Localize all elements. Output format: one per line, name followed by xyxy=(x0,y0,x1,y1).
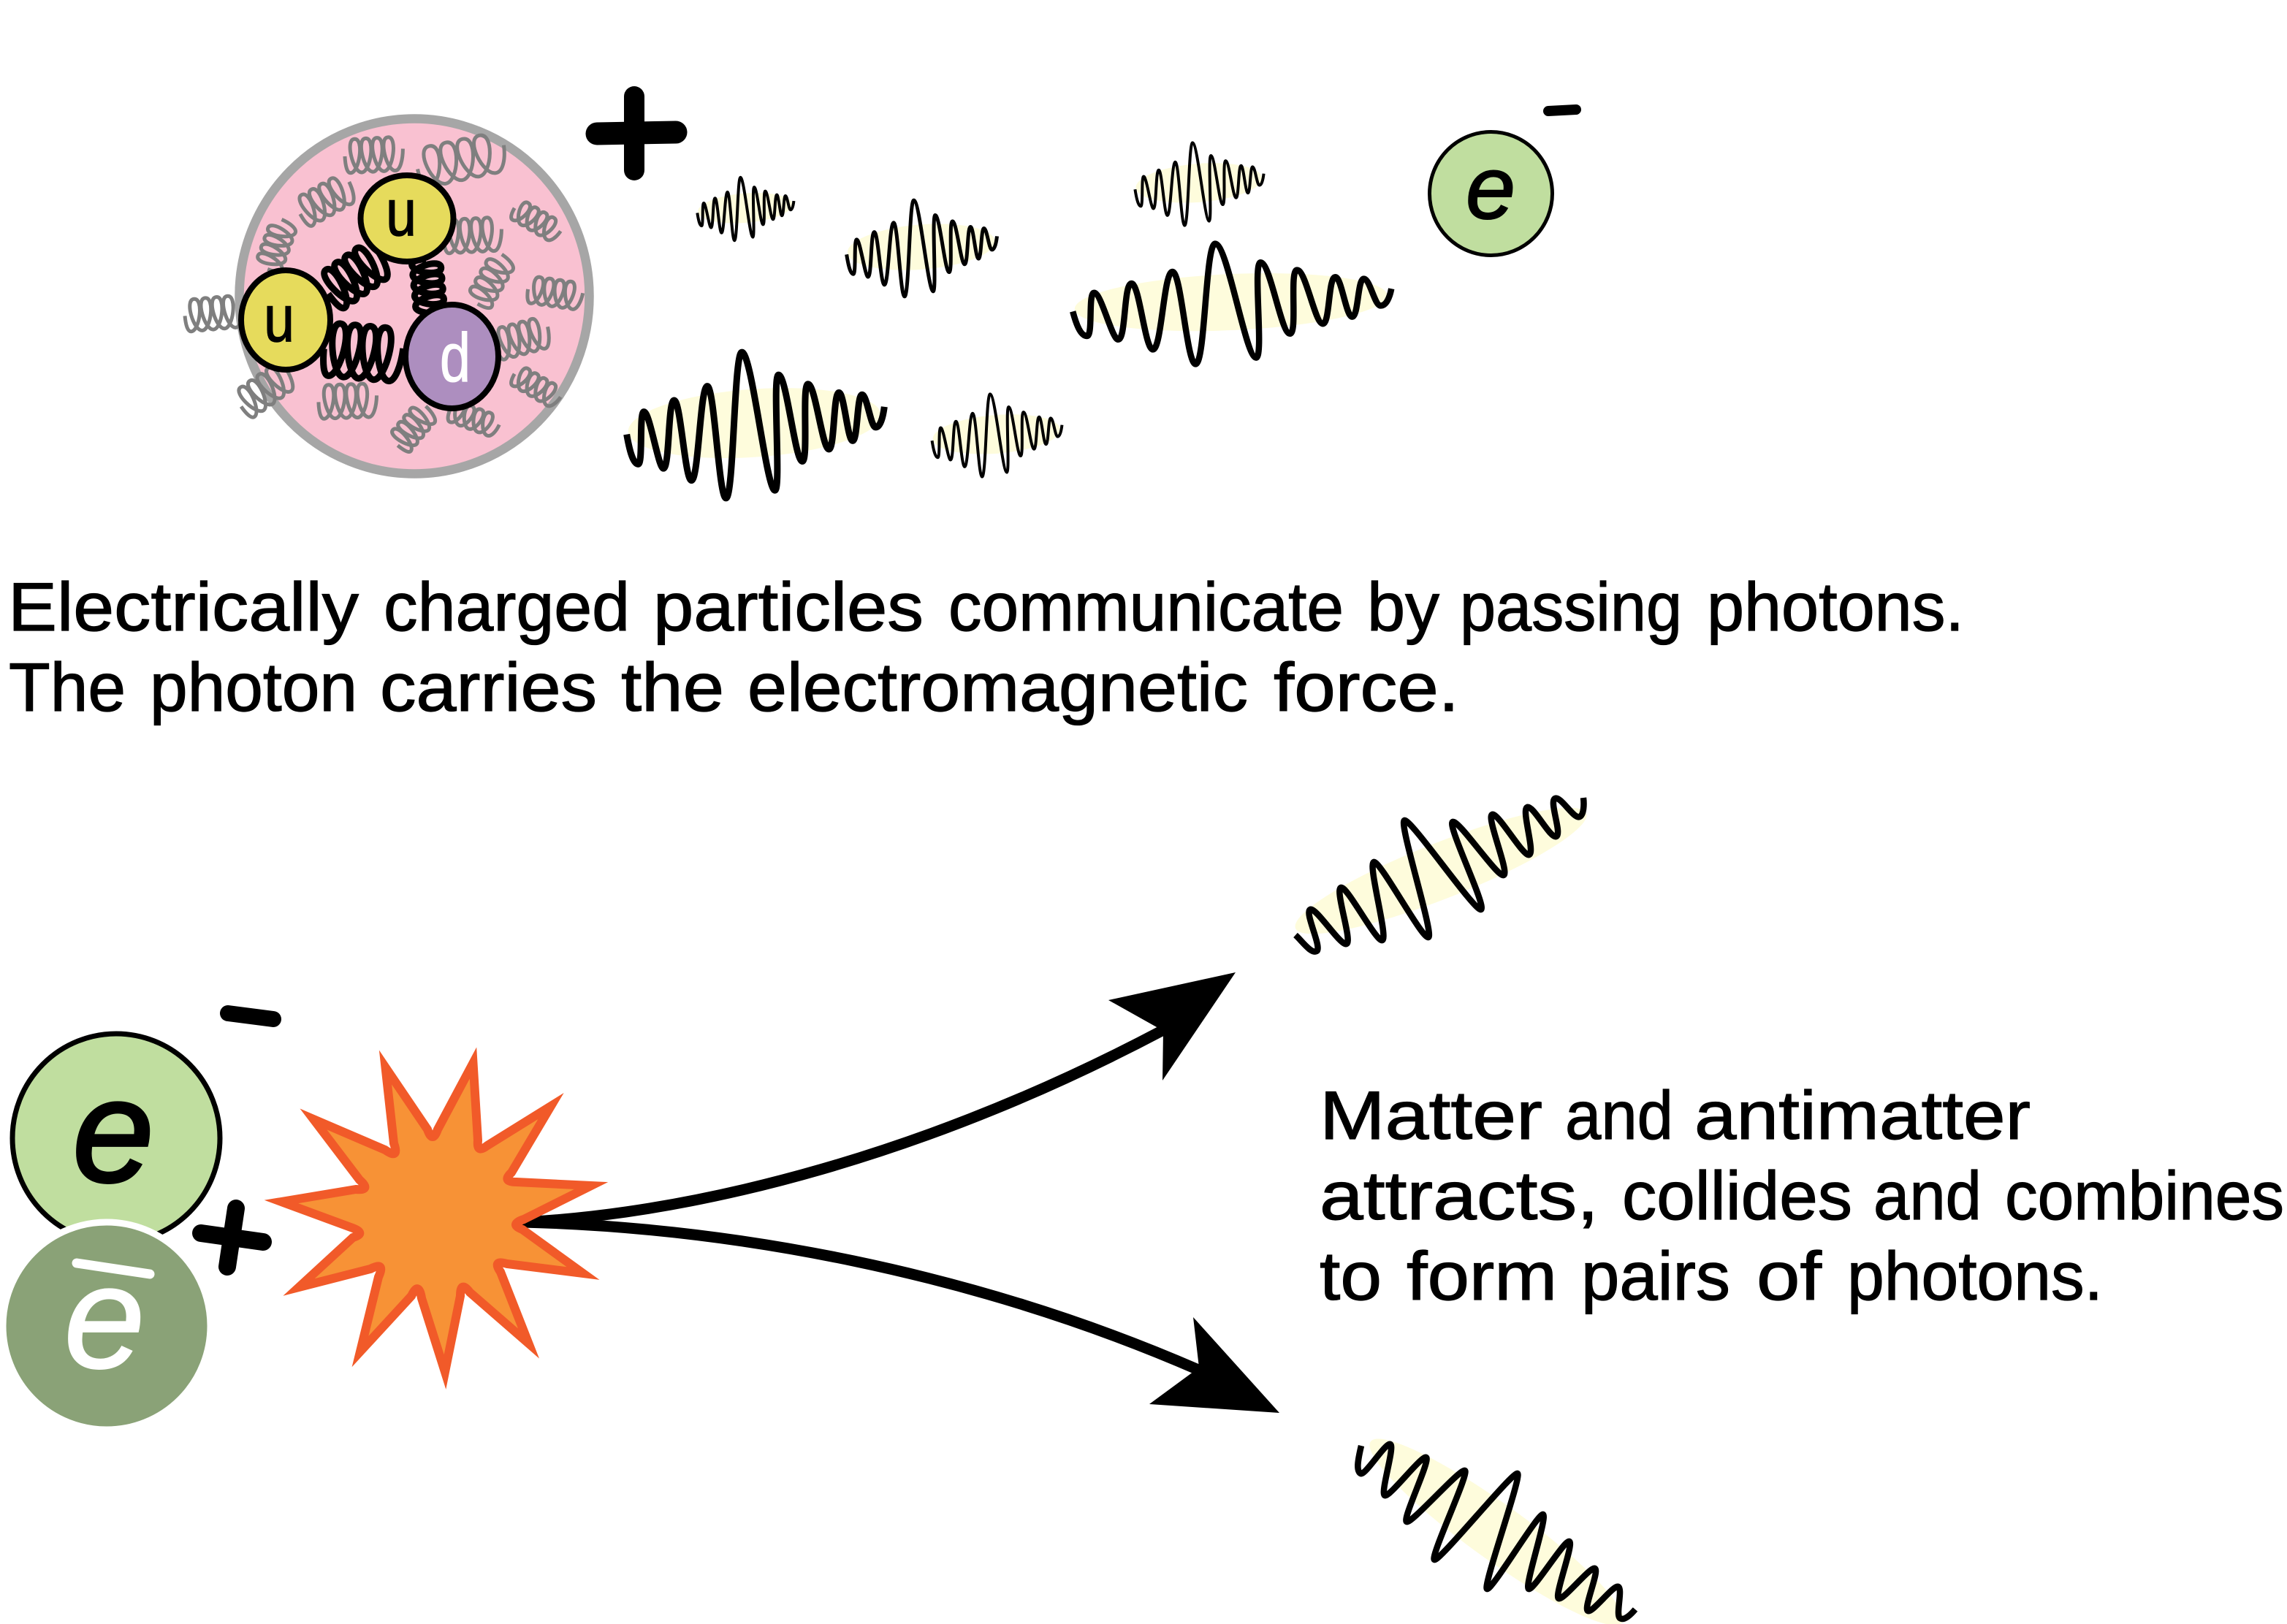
annihilation starburst xyxy=(281,1063,591,1372)
gray sea gluons xyxy=(183,131,585,454)
text: matter and antimatter explanation: form xyxy=(1407,1238,1557,1314)
down quark xyxy=(406,305,498,408)
plus sign on proton xyxy=(597,96,676,170)
text: electromagnetic force explanation: passing xyxy=(1460,568,1682,645)
up quark, top xyxy=(361,175,453,262)
arrow: lower photon path xyxy=(522,1222,1279,1413)
text: electromagnetic force explanation: carries xyxy=(380,649,597,725)
text: electromagnetic force explanation: by xyxy=(1367,568,1439,645)
electron, top: e xyxy=(1466,138,1515,237)
text: matter and antimatter explanation: attracts, xyxy=(1320,1157,1599,1234)
text: matter and antimatter explanation xyxy=(1320,1077,2284,1314)
photon: outgoing lower xyxy=(1355,1419,1638,1624)
text: matter and antimatter explanation: antimatter xyxy=(1694,1077,2031,1154)
photon: small bottom xyxy=(932,394,1062,477)
text: matter and antimatter explanation: to xyxy=(1320,1238,1382,1314)
text: matter and antimatter explanation: and xyxy=(1565,1077,1673,1154)
text: electromagnetic force explanation: the xyxy=(621,649,724,725)
text: electromagnetic force explanation xyxy=(8,568,1964,725)
minus sign on electron, top xyxy=(1548,110,1576,111)
minus sign on electron, bottom xyxy=(228,1013,273,1019)
proton body xyxy=(240,118,589,473)
photon: small top xyxy=(1135,142,1264,226)
photon: medium xyxy=(846,200,997,297)
positron xyxy=(3,1222,210,1430)
text: matter and antimatter explanation: Matter xyxy=(1320,1077,1542,1154)
positron: e xyxy=(64,1236,145,1399)
text: electromagnetic force explanation: force. xyxy=(1274,649,1459,725)
text: electromagnetic force explanation: communicate xyxy=(948,568,1344,645)
up quark, left xyxy=(241,270,330,370)
up quark, top: u xyxy=(386,176,416,250)
electron, top xyxy=(1429,131,1552,256)
text: electromagnetic force explanation: photon xyxy=(150,649,357,725)
electron, bottom xyxy=(12,1034,220,1243)
up quark, left: u xyxy=(264,282,294,356)
text: matter and antimatter explanation: and xyxy=(1873,1157,1982,1234)
text: matter and antimatter explanation: photons. xyxy=(1847,1238,2103,1314)
text: matter and antimatter explanation: of xyxy=(1757,1238,1822,1314)
text: electromagnetic force explanation: charged xyxy=(384,568,630,645)
photon: small left xyxy=(697,178,794,240)
text: electromagnetic force explanation: particles xyxy=(653,568,924,645)
photon: large upper right xyxy=(1072,244,1391,364)
arrow: upper photon path xyxy=(522,972,1236,1222)
photon: large lower left xyxy=(626,352,884,498)
down quark: d xyxy=(440,319,471,397)
photon: outgoing upper xyxy=(1285,788,1597,954)
text: matter and antimatter explanation: collides xyxy=(1622,1157,1852,1234)
text: matter and antimatter explanation: pairs xyxy=(1581,1238,1730,1314)
text: electromagnetic force explanation: The xyxy=(9,649,126,725)
text: electromagnetic force explanation: photons. xyxy=(1707,568,1964,645)
black gluons between quarks xyxy=(316,239,445,382)
panel: proton with quarks and gluons xyxy=(183,118,590,473)
text: electromagnetic force explanation: electromagnetic xyxy=(747,649,1248,725)
electron, bottom: e xyxy=(72,1050,154,1213)
plus sign on positron xyxy=(201,1208,263,1267)
text: electromagnetic force explanation: Electrically xyxy=(8,568,359,645)
